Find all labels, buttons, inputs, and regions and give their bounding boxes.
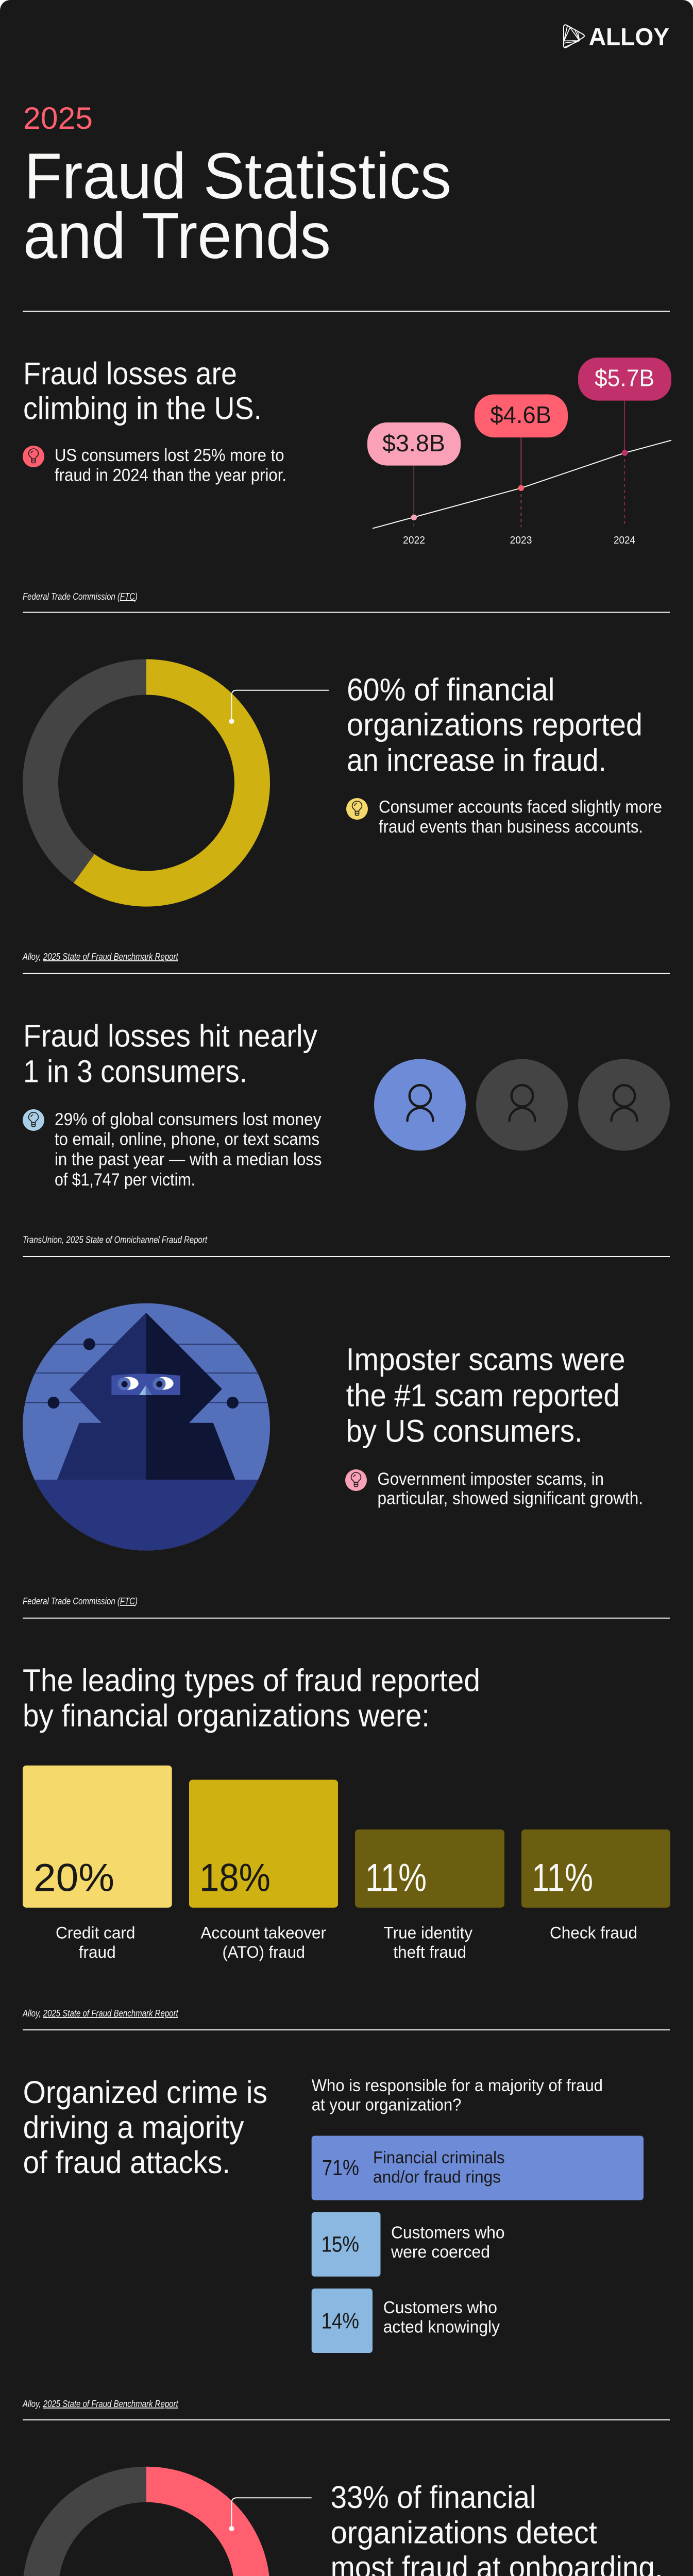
chart question: Who is responsible for a majority of fraud — [312, 2076, 603, 2095]
source: Federal Trade Commission (FTC) — [23, 1596, 138, 1606]
text block: fraud events than business accounts. — [379, 817, 643, 837]
panel: 60% reported increase — [22, 672, 662, 962]
title: Fraud Statistics — [24, 140, 451, 212]
heading — [23, 2075, 267, 2180]
bar: check fraud: Check fraud — [550, 1924, 637, 1942]
text block: Government imposter scams, in — [377, 1469, 604, 1489]
text block — [55, 1110, 322, 1190]
heading: organizations detect — [331, 2515, 597, 2550]
title — [23, 101, 451, 272]
text block — [55, 446, 286, 485]
source: Alloy, 2025 State of Fraud Benchmark Report — [22, 2399, 179, 2409]
heading: Fraud losses are — [23, 356, 237, 391]
source: TransUnion, 2025 State of Omnichannel Fraud Report — [23, 1234, 208, 1245]
bar: 15%: Customers who — [391, 2223, 505, 2242]
bar: credit card fraud: Credit card — [56, 1924, 135, 1942]
heading: 33% of financial — [331, 2480, 536, 2515]
heading: Fraud losses hit nearly — [23, 1019, 317, 1054]
text block: US consumers lost 25% more to — [55, 446, 284, 465]
heading: organizations reported — [347, 707, 643, 742]
heading: by US consumers. — [346, 1413, 583, 1448]
bar: account takeover: Account takeover — [200, 1924, 326, 1942]
icon: light bulb — [23, 446, 44, 467]
axis years: 2022 — [403, 535, 425, 546]
bar: check fraud: 11% — [532, 1856, 593, 1900]
bar: check fraud — [521, 1829, 670, 1942]
pill: $5.7B: $5.7B — [595, 364, 654, 391]
icon: light bulb — [345, 1469, 367, 1491]
panel: organized crime — [22, 2075, 644, 2409]
line chart: fraud losses — [367, 358, 671, 546]
bar: 14%: acted knowingly — [383, 2317, 500, 2336]
pill: $3.8B — [367, 422, 461, 466]
title: and Trends — [23, 199, 331, 272]
bar: credit card fraud: 20% — [33, 1856, 114, 1900]
panel: detect at onboarding — [22, 2480, 663, 2576]
heading — [346, 1342, 626, 1448]
panel: imposter scams — [23, 1303, 643, 1606]
text block: fraud in 2024 than the year prior. — [55, 466, 286, 485]
bar: 71%: and/or fraud rings — [373, 2167, 501, 2187]
axis years: 2023 — [510, 535, 532, 546]
heading: of fraud attacks. — [23, 2145, 230, 2180]
bar: true identity theft: theft fraud — [393, 1943, 466, 1961]
source: Alloy, 2025 State of Fraud Benchmark Report — [22, 952, 179, 962]
panel: leading types of fraud — [22, 1663, 670, 2019]
illustration: masked imposter — [23, 1303, 270, 1552]
bar: account takeover: 18% — [199, 1856, 271, 1900]
logo: Alloy: ALLOY — [589, 23, 669, 50]
heading — [23, 356, 262, 426]
bar: 15% — [312, 2212, 505, 2277]
text block: of $1,747 per victim. — [55, 1170, 195, 1190]
bar: credit card fraud — [23, 1766, 172, 1961]
text block: to email, online, phone, or text scams — [55, 1130, 319, 1149]
bar: credit card fraud: fraud — [79, 1943, 116, 1961]
bar: 71%: 71% — [322, 2156, 359, 2180]
source: Alloy, 2025 State of Fraud Benchmark Report — [22, 2008, 179, 2019]
pill: $4.6B — [475, 395, 568, 437]
chart question — [312, 2076, 603, 2114]
heading: Organized crime is — [23, 2075, 267, 2110]
heading: by financial organizations were: — [23, 1698, 430, 1733]
donut chart: 33% — [40, 2484, 312, 2576]
icons: 1 in 3 people — [374, 1059, 670, 1151]
icon: light bulb — [23, 1109, 44, 1131]
heading — [23, 1663, 480, 1733]
donut chart: 60% — [40, 677, 329, 889]
panel: fraud losses climbing — [23, 356, 671, 602]
heading: an increase in fraud. — [347, 743, 606, 778]
bar: 71%: Financial criminals — [373, 2148, 505, 2167]
heading: The leading types of fraud reported — [23, 1663, 480, 1698]
text block: particular, showed significant growth. — [377, 1489, 643, 1509]
heading: 1 in 3 consumers. — [23, 1054, 247, 1089]
heading — [23, 1019, 317, 1089]
text block — [377, 1469, 643, 1509]
bar: 14%: 14% — [322, 2309, 359, 2334]
heading: the #1 scam reported — [346, 1378, 620, 1413]
title: 2025 — [23, 101, 93, 135]
bar: 15%: were coerced — [391, 2242, 490, 2261]
bar: true identity theft — [355, 1829, 504, 1961]
bar: 15%: 15% — [322, 2232, 359, 2257]
axis years: 2024 — [614, 535, 635, 546]
axis years — [403, 535, 635, 546]
bar: 14%: Customers who — [383, 2298, 497, 2317]
heading — [331, 2480, 663, 2576]
bar: account takeover — [189, 1780, 338, 1961]
pill: $5.7B — [578, 358, 671, 401]
heading — [347, 672, 643, 778]
bar: true identity theft: True identity — [383, 1924, 472, 1942]
bar: 14% — [312, 2289, 500, 2353]
text block: Consumer accounts faced slightly more — [379, 798, 662, 817]
bar: true identity theft: 11% — [365, 1856, 427, 1900]
heading: Imposter scams were — [346, 1342, 626, 1377]
pill: $3.8B: $3.8B — [382, 430, 445, 456]
text block — [379, 798, 662, 837]
icon: light bulb — [346, 798, 368, 820]
source: Federal Trade Commission (FTC) — [23, 591, 138, 602]
heading: 60% of financial — [347, 672, 554, 707]
text block: in the past year — with a median loss — [55, 1150, 322, 1170]
heading: driving a majority — [23, 2110, 244, 2145]
bar: account takeover: (ATO) fraud — [223, 1943, 305, 1961]
heading: climbing in the US. — [23, 391, 262, 426]
bar: 71% — [312, 2136, 644, 2200]
text block: 29% of global consumers lost money — [55, 1110, 322, 1129]
pill: $4.6B: $4.6B — [490, 401, 551, 428]
panel: 1 in 3 consumers — [23, 1019, 670, 1245]
chart question: at your organization? — [312, 2095, 462, 2114]
